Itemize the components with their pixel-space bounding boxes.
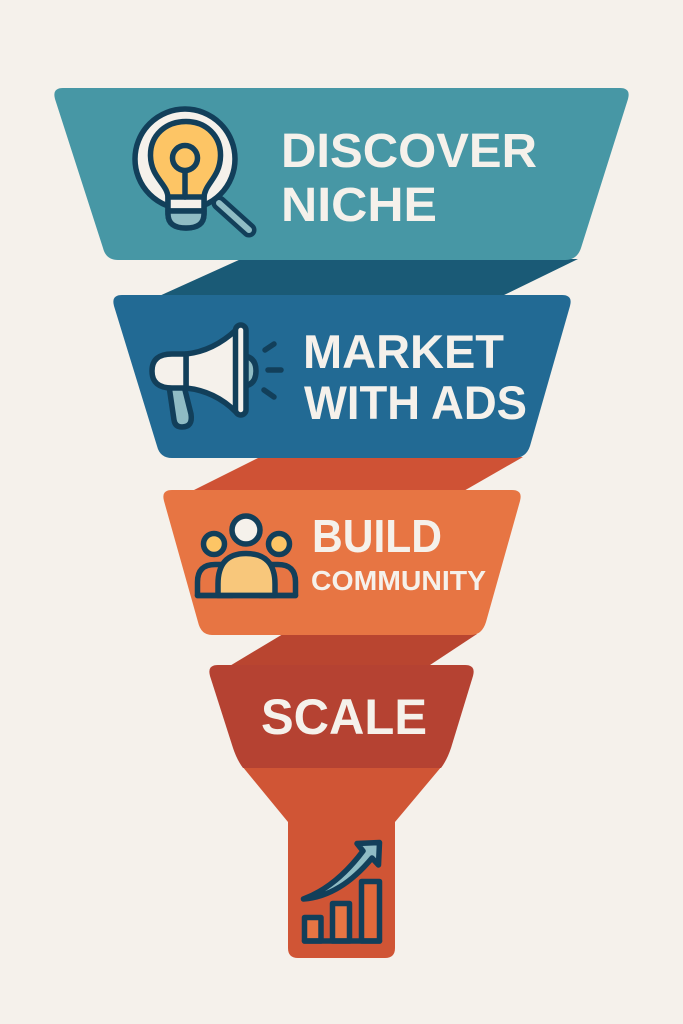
panel: build community: [163, 490, 521, 635]
icon: megaphone: [152, 325, 281, 427]
heading: discover niche: [281, 125, 537, 232]
heading: build community: BUILD: [312, 510, 442, 562]
heading: build community: COMMUNITY: [311, 565, 486, 596]
funnel spout: [242, 766, 442, 958]
heading: build community: [311, 510, 486, 596]
connector: community to scale: [228, 634, 477, 667]
heading: scale: SCALE: [261, 689, 427, 745]
icon: light bulb magnifier: [135, 109, 249, 230]
panel: market with ads: [113, 295, 571, 458]
heading: discover niche: DISCOVER: [281, 125, 537, 178]
icon: growth chart: [304, 842, 380, 941]
heading: discover niche: NICHE: [281, 179, 437, 232]
heading: market with ads: [303, 325, 527, 429]
heading: market with ads: WITH ADS: [304, 376, 527, 429]
panel: scale: [209, 665, 474, 768]
panel: discover niche: [54, 88, 629, 260]
icon: people group: [198, 516, 296, 596]
connector: discover to market: [157, 259, 578, 297]
connector: market to community: [190, 457, 523, 492]
heading: market with ads: MARKET: [303, 325, 504, 378]
